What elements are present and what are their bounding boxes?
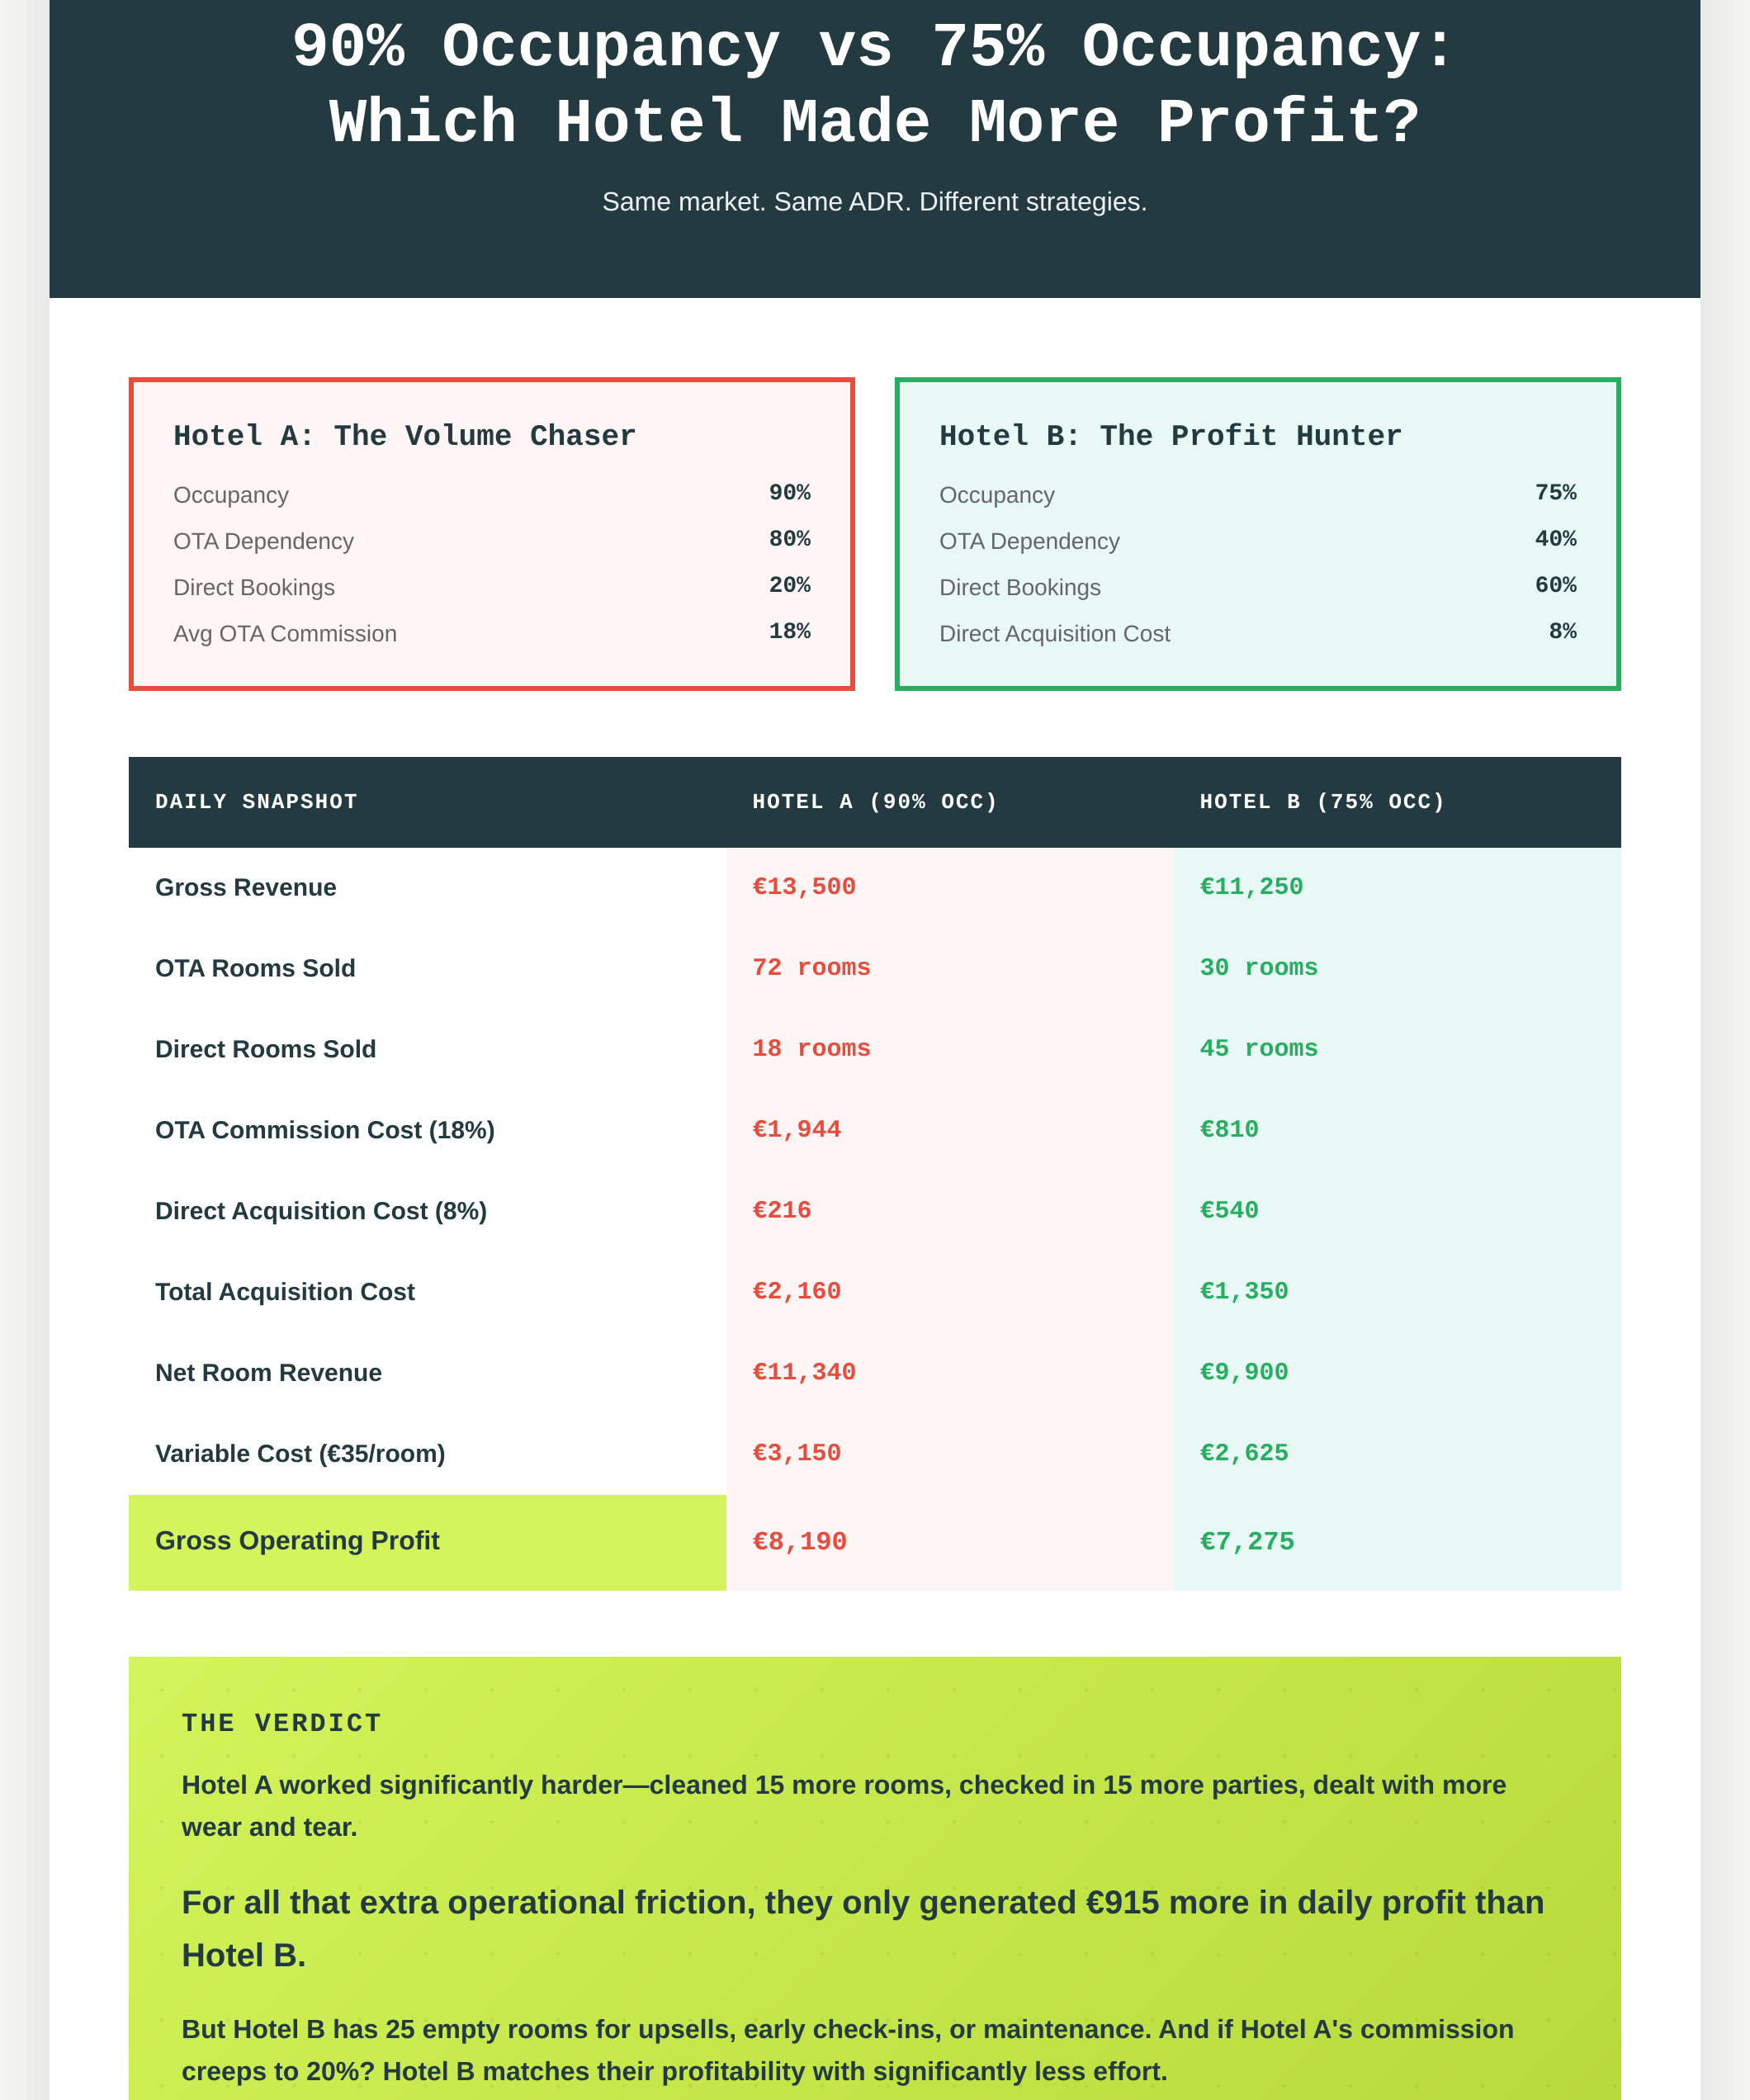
stat: direct bookings: 60% (1535, 574, 1577, 599)
row: net room revenue: Net Room Revenue (155, 1360, 382, 1387)
stat: occupancy: Occupancy (939, 482, 1055, 508)
row: OTA commission cost: €1,944 (753, 1117, 842, 1145)
verdict heading: THE VERDICT (182, 1709, 383, 1739)
row: gross operating profit: Gross Operating Profit (155, 1525, 440, 1555)
row: variable cost: €3,150 (753, 1440, 842, 1469)
stat: direct acquisition cost (939, 620, 1577, 646)
stat: direct acquisition cost: 8% (1549, 620, 1577, 646)
row: variable cost: Variable Cost (€35/room) (155, 1440, 446, 1468)
table header: DAILY SNAPSHOT (155, 790, 358, 815)
header banner (50, 0, 1700, 298)
row: gross revenue: €11,250 (1200, 874, 1304, 902)
row: direct acquisition cost: €540 (1200, 1198, 1260, 1226)
stat: OTA dependency: OTA Dependency (173, 528, 354, 554)
row: direct rooms sold: Direct Rooms Sold (155, 1036, 376, 1063)
stat: avg OTA commission: Avg OTA Commission (173, 621, 397, 646)
row: net room revenue (155, 1333, 1621, 1414)
row: total acquisition cost: €1,350 (1200, 1279, 1289, 1307)
stat: OTA dependency (939, 527, 1577, 554)
row: OTA commission cost (155, 1090, 1621, 1171)
row: OTA rooms sold: 72 rooms (753, 955, 872, 983)
container shadow left (0, 0, 50, 2100)
title: Which Hotel Made More Profit? (329, 89, 1421, 160)
row: direct acquisition cost (155, 1171, 1621, 1252)
stat: occupancy: Occupancy (173, 482, 289, 508)
row: OTA rooms sold: OTA Rooms Sold (155, 955, 356, 982)
stat: OTA dependency: 80% (769, 527, 811, 553)
row: OTA commission cost: OTA Commission Cost (18%) (155, 1117, 495, 1144)
row: OTA commission cost: €810 (1200, 1117, 1260, 1145)
row: OTA rooms sold (155, 929, 1621, 1010)
row: total acquisition cost (155, 1252, 1621, 1333)
row: total acquisition cost: €2,160 (753, 1279, 842, 1307)
container shadow right (1700, 0, 1750, 2100)
stat: occupancy: 90% (769, 481, 811, 507)
subtitle: Same market. Same ADR. Different strategies. (603, 187, 1147, 216)
verdict paragraph 1: Hotel A worked significantly harder—cleaned 15 more rooms, checked in 15 more parties, dealt with more wear and tear. (182, 1770, 1506, 1842)
row: net room revenue: €11,340 (753, 1360, 857, 1388)
row: gross operating profit: €7,275 (1200, 1527, 1295, 1558)
table header (129, 757, 1621, 848)
panel: Hotel A (129, 377, 855, 691)
table header: HOTEL A (90% OCC) (753, 790, 1000, 815)
stat: direct bookings (173, 574, 811, 600)
row: direct rooms sold: 45 rooms (1200, 1036, 1319, 1064)
comparison table (129, 757, 1621, 1591)
verdict highlight: For all that extra operational friction, they only generated €915 more in daily profit than Hotel B. (182, 1885, 1544, 1974)
stat: OTA dependency: 40% (1535, 527, 1577, 553)
stat: OTA dependency (173, 527, 811, 554)
stat: avg OTA commission: 18% (769, 620, 811, 646)
title: 90% Occupancy vs 75% Occupancy: (291, 13, 1459, 84)
stat: OTA dependency: OTA Dependency (939, 528, 1120, 554)
stat: occupancy (173, 481, 811, 508)
stat: avg OTA commission (173, 620, 811, 646)
row: variable cost: €2,625 (1200, 1440, 1289, 1469)
row: direct acquisition cost: Direct Acquisition Cost (8%) (155, 1198, 487, 1225)
panel: Hotel B (895, 377, 1621, 691)
title (291, 13, 1459, 160)
row: variable cost (155, 1414, 1621, 1495)
heading: Hotel A: Hotel A: The Volume Chaser (173, 420, 637, 454)
row: OTA rooms sold: 30 rooms (1200, 955, 1319, 983)
stat: occupancy (939, 481, 1577, 508)
row: gross operating profit (129, 1495, 1621, 1591)
stat: direct bookings: Direct Bookings (939, 575, 1101, 600)
table header: HOTEL B (75% OCC) (1200, 790, 1447, 815)
heading: Hotel B: Hotel B: The Profit Hunter (939, 420, 1403, 454)
panel: the verdict (129, 1657, 1621, 2100)
stat: occupancy: 75% (1535, 481, 1577, 507)
row: net room revenue: €9,900 (1200, 1360, 1289, 1388)
row: total acquisition cost: Total Acquisition Cost (155, 1279, 415, 1306)
row: direct acquisition cost: €216 (753, 1198, 812, 1226)
stat: direct acquisition cost: Direct Acquisition Cost (939, 621, 1171, 646)
row: gross revenue: Gross Revenue (155, 874, 337, 901)
verdict paragraph 2: But Hotel B has 25 empty rooms for upsells, early check-ins, or maintenance. And if Hotel A's commission creeps to 20%? Hotel B matches their profitability with significantly less effort. (182, 2014, 1515, 2086)
row: gross operating profit: €8,190 (753, 1527, 848, 1558)
stat: direct bookings: Direct Bookings (173, 575, 335, 600)
row: direct rooms sold: 18 rooms (753, 1036, 872, 1064)
stat: direct bookings (939, 574, 1577, 600)
stat: direct bookings: 20% (769, 574, 811, 599)
row: direct rooms sold (155, 1010, 1621, 1090)
row: gross revenue: €13,500 (753, 874, 857, 902)
row: gross revenue (155, 848, 1621, 929)
